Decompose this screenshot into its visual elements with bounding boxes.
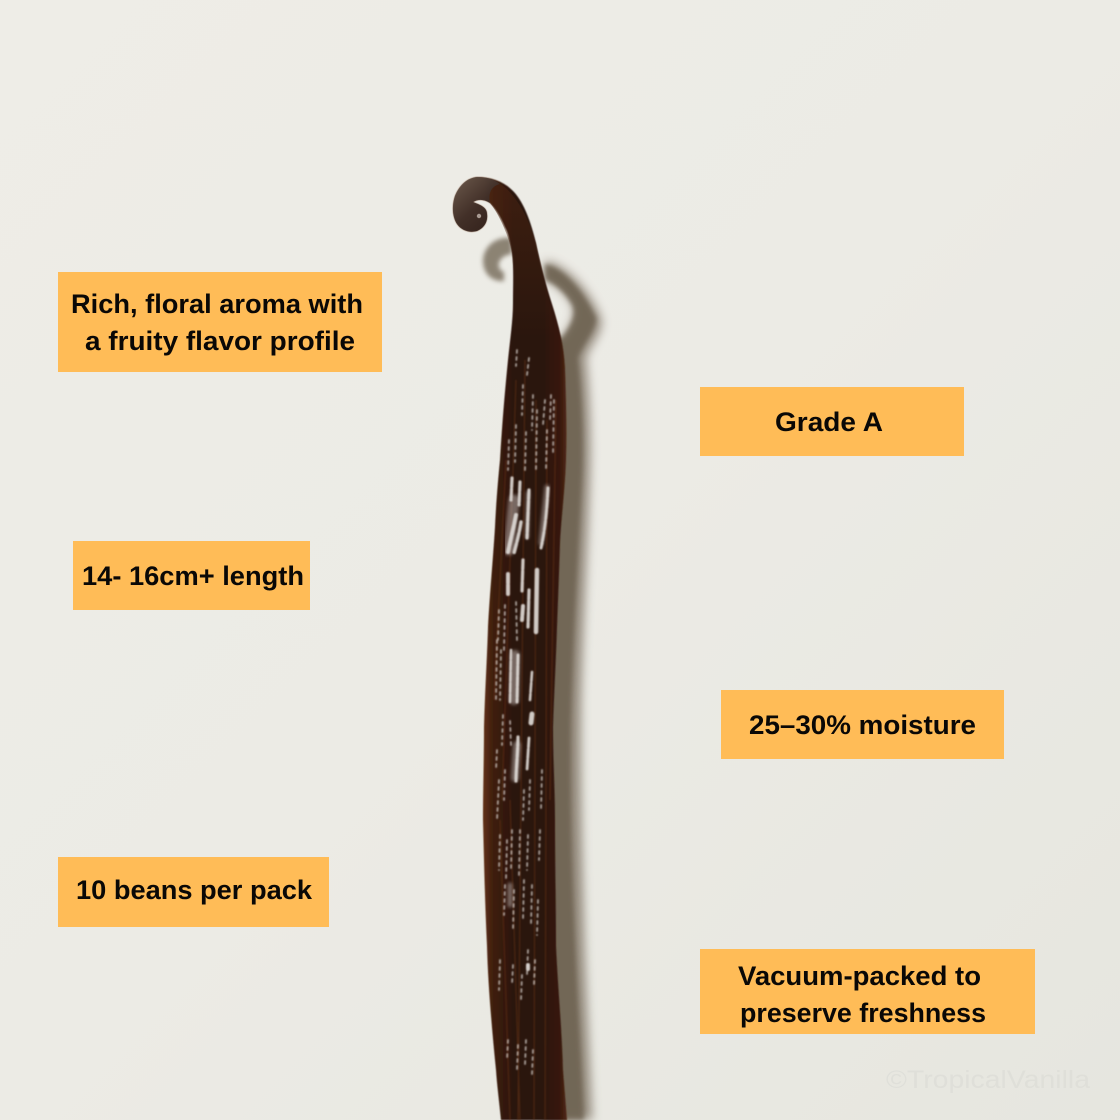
callout: pack size: 10 beans per pack (76, 875, 313, 905)
bean body (453, 177, 567, 1120)
callout: aroma: a fruity flavor profile (85, 326, 355, 356)
callout: length (73, 541, 310, 610)
watermark: ©TropicalVanilla (886, 1066, 1090, 1094)
callout: aroma: Rich, floral aroma with (71, 289, 363, 319)
stem tint (490, 180, 555, 340)
callout: aroma (58, 272, 382, 372)
callout: pack size (58, 857, 329, 927)
curled tip (453, 177, 500, 232)
callout: moisture: 25–30% moisture (749, 710, 976, 740)
callout: vacuum packed: Vacuum-packed to (738, 961, 981, 991)
callout: vacuum packed (700, 949, 1035, 1034)
bean highlights (496, 350, 554, 1075)
bean streaks (494, 360, 556, 1120)
vanilla bean (453, 177, 567, 1120)
curl highlight (477, 214, 481, 218)
callout: grade: Grade A (775, 407, 883, 437)
bean shadow (483, 238, 601, 1120)
callout: vacuum packed: preserve freshness (740, 998, 986, 1028)
callout: grade (700, 387, 964, 456)
callout: length: 14- 16cm+ length (82, 561, 304, 591)
callout: moisture (721, 690, 1004, 759)
diffuse gloss (509, 487, 547, 905)
